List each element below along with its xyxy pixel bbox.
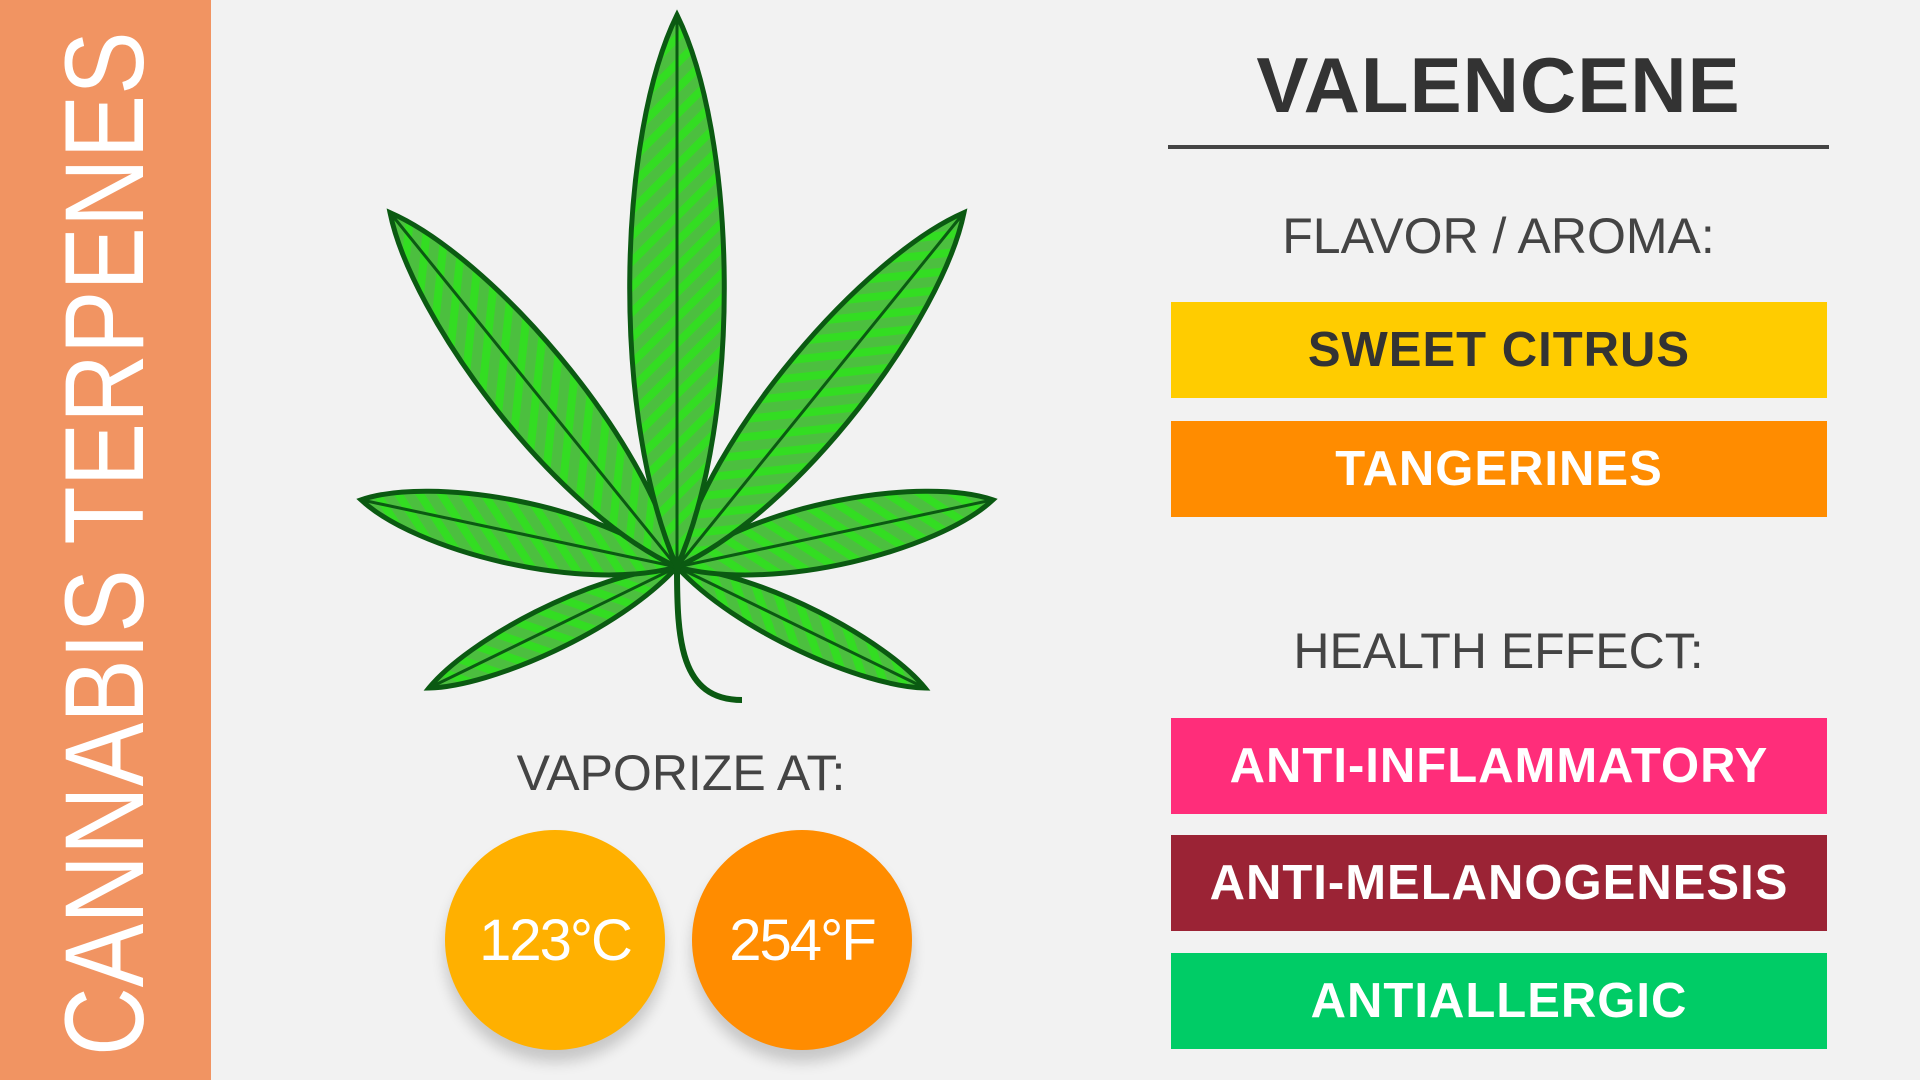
- bar: tangerines: [1171, 421, 1827, 517]
- health label: HEALTH EFFECT:: [1293, 623, 1704, 679]
- bar: anti-melanogenesis: ANTI-MELANOGENESIS: [1210, 856, 1788, 910]
- bar: anti-inflammatory: ANTI-INFLAMMATORY: [1230, 739, 1768, 793]
- flavor label: FLAVOR / AROMA:: [1282, 208, 1715, 264]
- title: VALENCENE: [1256, 41, 1741, 129]
- circle: celsius: 123°C: [479, 908, 631, 972]
- bar: sweet citrus: SWEET CITRUS: [1308, 323, 1690, 377]
- bar: tangerines: TANGERINES: [1335, 442, 1663, 496]
- bar: anti-melanogenesis: [1171, 835, 1827, 931]
- bar: antiallergic: [1171, 953, 1827, 1049]
- sidebar: [0, 0, 211, 1080]
- sidebar title: CANNABIS TERPENES: [42, 31, 167, 1056]
- bar: anti-inflammatory: [1171, 718, 1827, 814]
- circle: celsius: [445, 830, 665, 1050]
- vaporize label: VAPORIZE AT:: [517, 745, 845, 801]
- circle: fahrenheit: [692, 830, 912, 1050]
- circle: fahrenheit: 254°F: [729, 908, 875, 972]
- bar: sweet citrus: [1171, 302, 1827, 398]
- bar: antiallergic: ANTIALLERGIC: [1311, 974, 1687, 1028]
